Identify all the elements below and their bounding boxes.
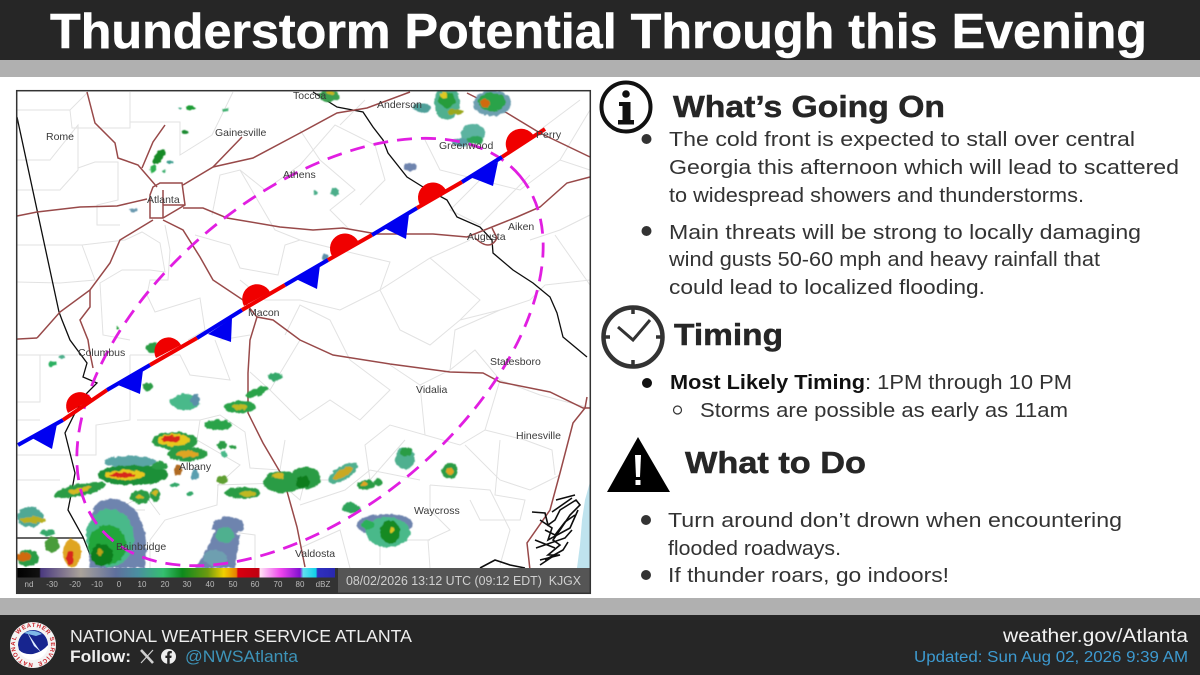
city labels: Columbus — [78, 347, 125, 359]
city labels — [46, 90, 562, 560]
city labels: Waycross — [414, 505, 460, 517]
city labels: Bainbridge — [116, 541, 166, 553]
city labels: Toccoa — [293, 90, 326, 102]
city labels: Aiken — [508, 221, 534, 233]
radar timestamp: 08/02/2026 13:12 UTC (09:12 EDT) KJGX — [346, 573, 581, 588]
reflectivity legend: 80 — [296, 580, 305, 589]
bullet text block: Georgia this afternoon which will lead to scattered — [669, 156, 1179, 179]
interstate highways — [0, 92, 590, 570]
icon: NWS logo: NATIONAL WEATHER SERVICE — [10, 622, 56, 668]
action text block: Turn around don’t drown when encountering — [668, 509, 1122, 532]
icon: warning triangle — [607, 437, 670, 492]
timing text block — [642, 371, 1072, 422]
coastal water — [577, 482, 590, 568]
city labels: Albany — [179, 461, 212, 473]
footer banner — [0, 598, 1200, 675]
reflectivity legend: 20 — [161, 580, 170, 589]
panel: radar map — [16, 90, 592, 594]
reflectivity legend: 50 — [229, 580, 238, 589]
city labels: Augusta — [467, 231, 506, 243]
city labels: Gainesville — [215, 127, 267, 139]
bullet text block: The cold front is expected to stall over central — [669, 128, 1135, 151]
city labels: Athens — [283, 169, 316, 181]
city labels: Anderson — [377, 99, 422, 111]
bullet text block: could lead to localized flooding. — [669, 276, 985, 299]
city labels: Atlanta — [147, 194, 180, 206]
heading: What’s Going On — [673, 89, 945, 124]
reflectivity legend: 10 — [138, 580, 147, 589]
action text block: If thunder roars, go indoors! — [668, 564, 949, 587]
section: What to Do — [607, 437, 1122, 587]
title: Thunderstorm Potential Through this Evening — [50, 5, 1147, 59]
updated timestamp: Updated: Sun Aug 02, 2026 9:39 AM — [914, 649, 1188, 666]
reflectivity legend: -10 — [91, 580, 103, 589]
city labels: Vidalia — [416, 384, 447, 396]
bullet text block: wind gusts 50-60 mph and heavy rainfall that — [668, 248, 1100, 271]
action text block — [641, 509, 1122, 587]
reflectivity legend: 60 — [251, 580, 260, 589]
heading: What to Do — [685, 445, 866, 480]
reflectivity legend: 30 — [183, 580, 192, 589]
radar timestamp — [338, 568, 590, 593]
reflectivity legend: -30 — [46, 580, 58, 589]
icon: information — [602, 82, 650, 132]
bullet text block — [642, 128, 1179, 299]
timing text block: : 1PM through 10 PM — [865, 371, 1072, 394]
timing text block: Storms are possible as early as 11am — [700, 399, 1068, 422]
section: What's Going On — [602, 82, 1179, 299]
timing text block: Most Likely Timing — [670, 371, 865, 394]
follow label: Follow: — [70, 648, 131, 666]
icon: X — [141, 650, 153, 663]
website: weather.gov/Atlanta — [1002, 626, 1188, 647]
action text block: flooded roadways. — [668, 537, 841, 560]
icon: clock — [604, 308, 662, 366]
icon: Facebook — [161, 649, 176, 664]
state boundaries — [17, 92, 587, 567]
section: Timing — [604, 308, 1072, 422]
reflectivity legend: 0 — [117, 580, 122, 589]
social handle: @NWSAtlanta — [185, 647, 299, 666]
reflectivity legend: -20 — [69, 580, 81, 589]
reflectivity legend: dBZ — [316, 580, 330, 589]
office name: NATIONAL WEATHER SERVICE ATLANTA — [70, 626, 412, 646]
reflectivity legend: 70 — [274, 580, 283, 589]
city labels: Macon — [248, 307, 280, 319]
city labels: Hinesville — [516, 430, 561, 442]
city labels: Rome — [46, 131, 74, 143]
reflectivity legend: 40 — [206, 580, 215, 589]
radar echoes — [15, 86, 511, 568]
storm potential area dashed ellipse — [75, 136, 545, 568]
coastal marsh — [480, 495, 580, 568]
reflectivity legend: nd — [25, 580, 33, 589]
city labels: Valdosta — [295, 548, 335, 560]
county boundaries — [17, 92, 590, 568]
stationary front — [18, 129, 545, 449]
header banner — [0, 0, 1200, 77]
bullet text block: to widespread showers and thunderstorms. — [669, 184, 1084, 207]
city labels: Statesboro — [490, 356, 541, 368]
reflectivity legend — [17, 568, 338, 593]
city labels: Perry — [536, 129, 562, 141]
city labels: Greenwood — [439, 140, 493, 152]
heading: Timing — [674, 317, 783, 352]
bullet text block: Main threats will be strong to locally damaging — [669, 221, 1141, 244]
